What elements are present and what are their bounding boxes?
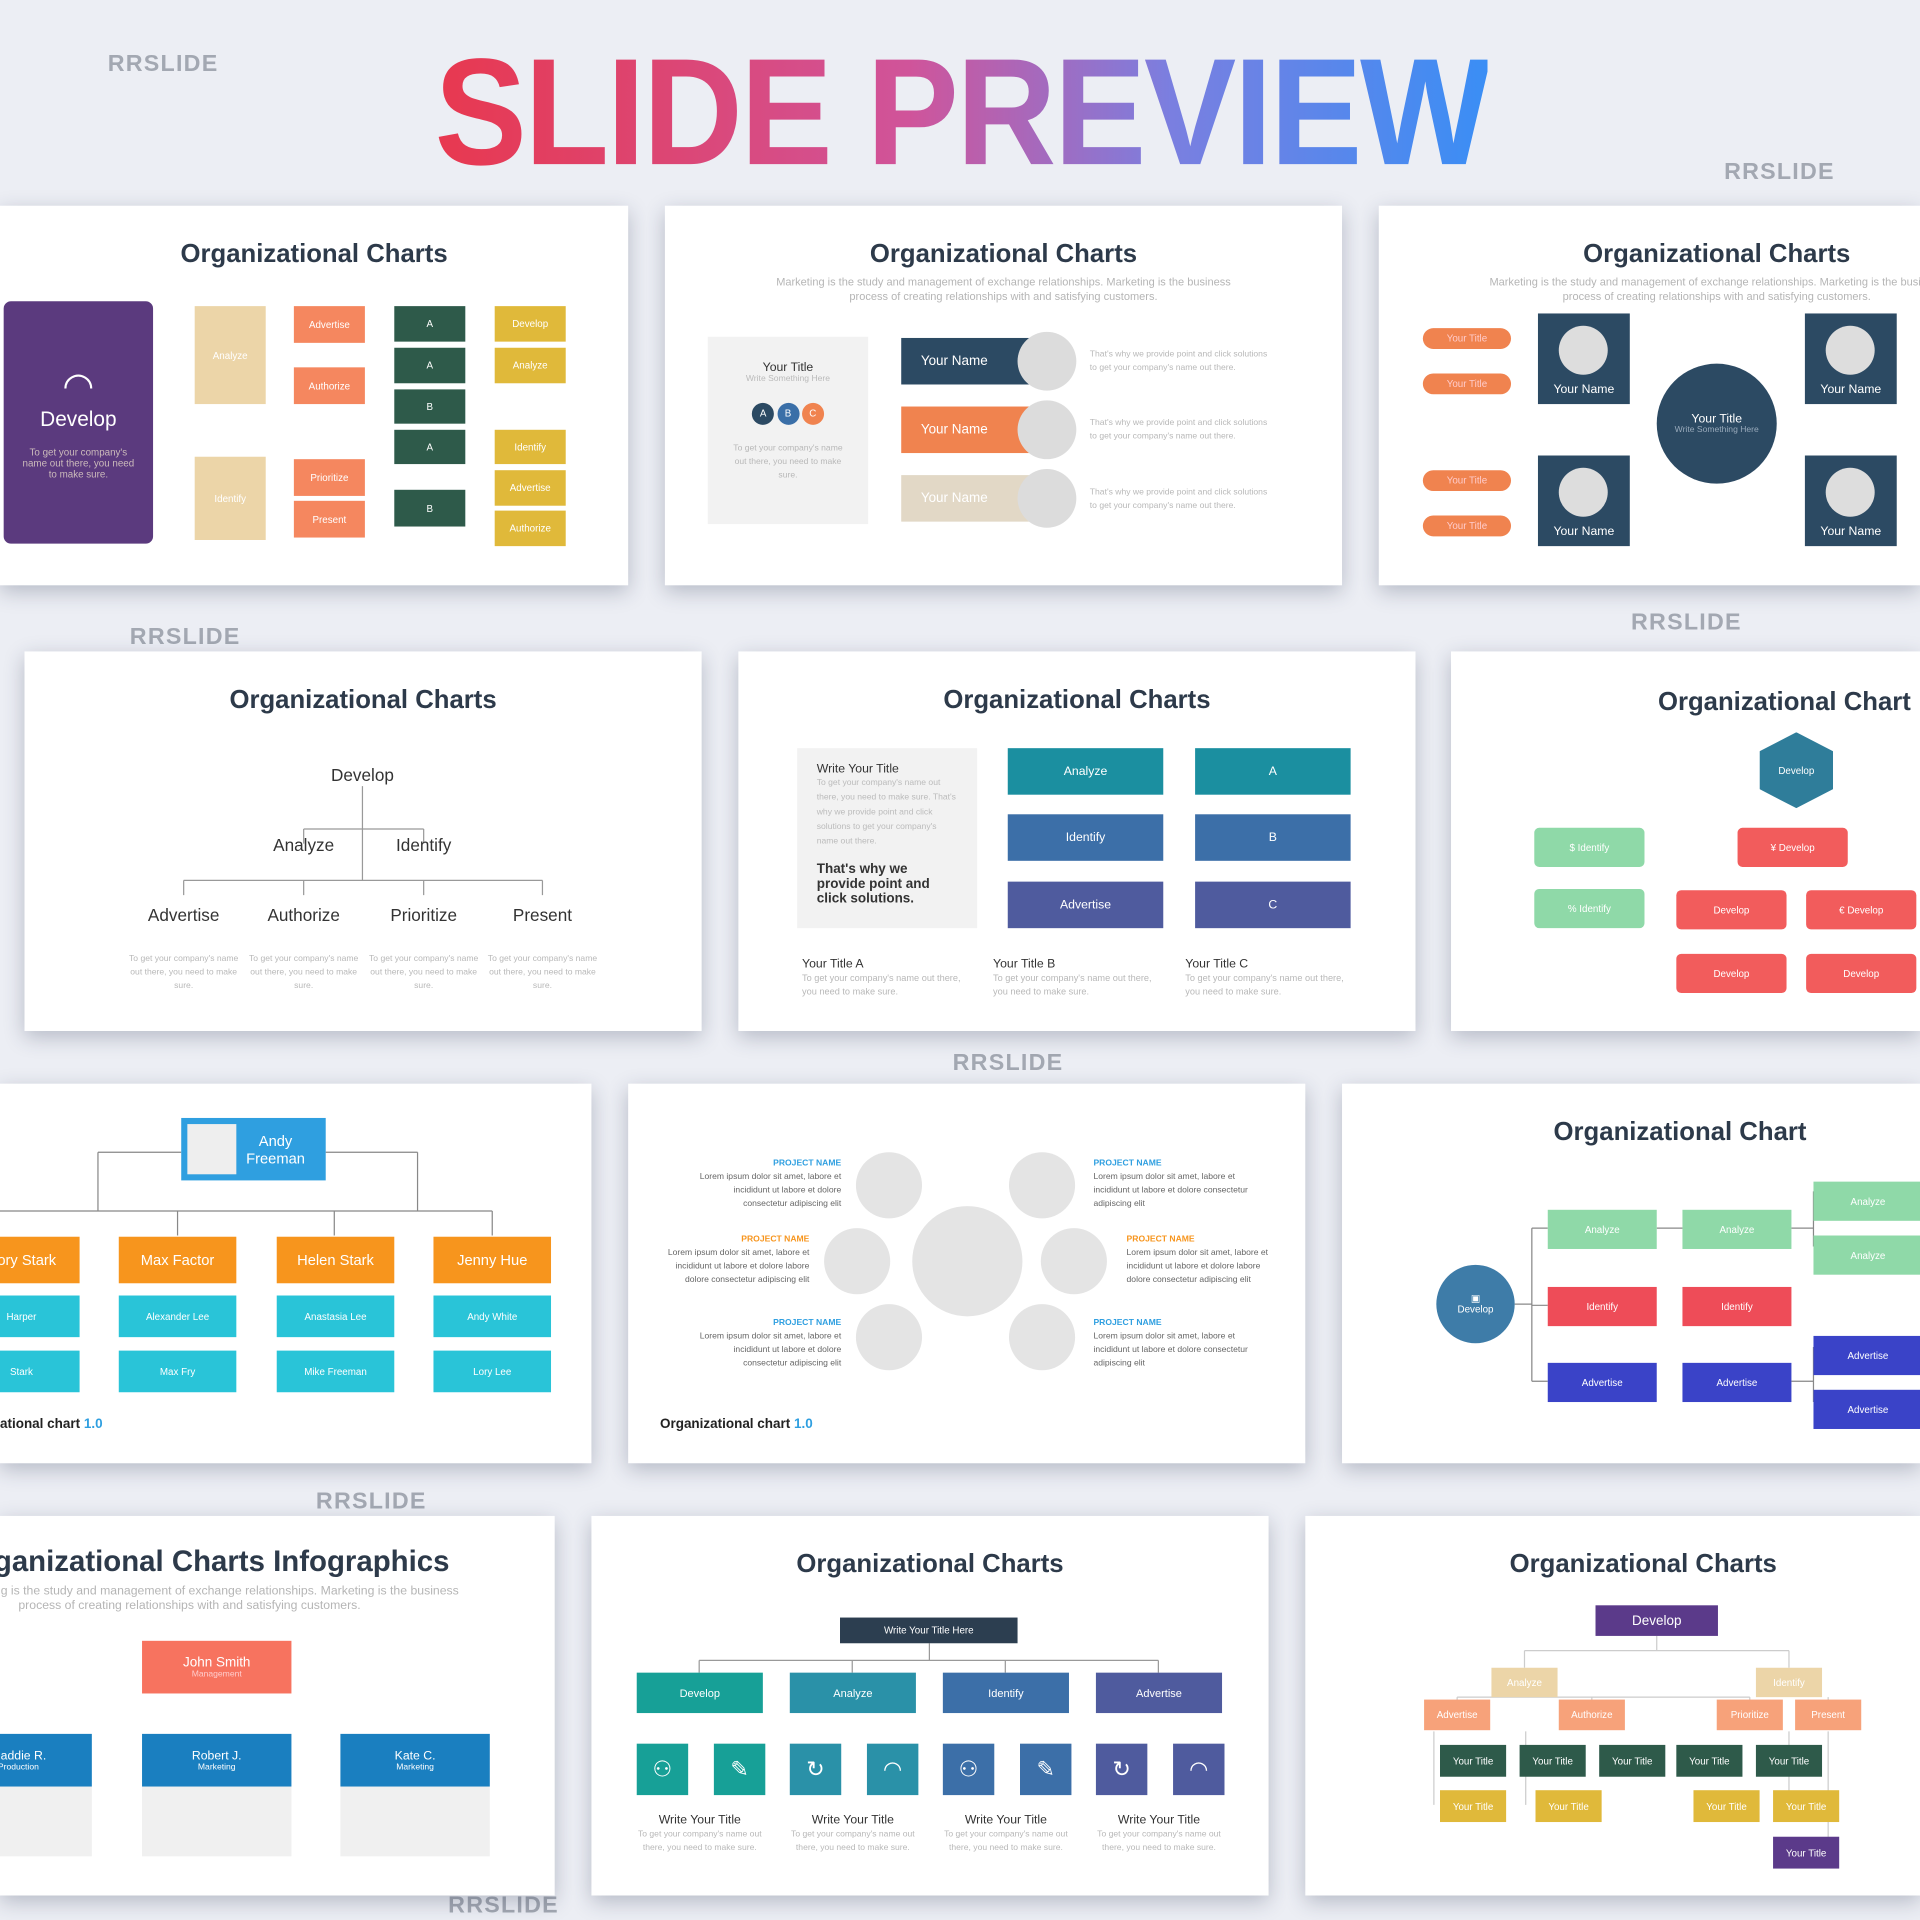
slide 8: circles: Lorem ipsum dolor sit amet, labore et incididunt ut labore et dolore labore dolore consectetur adipiscing elit	[1127, 1249, 1268, 1284]
slide 2: names list: to get your company's name out there.	[1090, 432, 1236, 441]
left panel: B	[785, 408, 791, 419]
slide 1: org chart develop: B	[427, 401, 433, 412]
slide 6: hexagon chart: Develop	[1713, 968, 1749, 979]
slide 12: tiered chart: Present	[1811, 1709, 1845, 1720]
slide 4: tree: Identify	[396, 835, 451, 855]
slide 8: circles	[628, 1084, 1305, 1463]
slide 4: tree: To get your company's name out there, you need to make sure.	[369, 955, 478, 991]
slide 11: icons chart: To get your company's name out there, you need to make sure.	[944, 1831, 1068, 1853]
slide 3: circle hub: Your Title	[1447, 333, 1487, 344]
watermark: RRSLIDE	[448, 1893, 559, 1919]
slide 8: circles: Lorem ipsum dolor sit amet, labore et incididunt ut labore et dolore consectetur adipiscing elit	[1093, 1173, 1248, 1209]
slide 3: circle hub	[1379, 206, 1920, 585]
slide 5: grid: To get your company's name out there,	[802, 972, 961, 983]
left panel: Your Title	[763, 361, 813, 375]
title: SLIDE PREVIEW	[435, 28, 1488, 197]
slide 1: org chart develop: Develop	[512, 318, 548, 329]
slide 6: hexagon chart: Develop	[1713, 904, 1749, 915]
slide 10: infographics: Robert J.	[192, 1749, 242, 1763]
slide 5: grid: you need to make sure.	[993, 986, 1089, 997]
slide 12: tiered chart: Your Title	[1453, 1755, 1493, 1766]
slide 4: tree: To get your company's name out there, you need to make sure.	[488, 955, 597, 991]
watermark: RRSLIDE	[1724, 159, 1835, 185]
slide 9: color chart: Identify	[1721, 1301, 1753, 1312]
slide 8: circles: Lorem ipsum dolor sit amet, labore et incididunt ut labore et dolore consectetur adipiscing elit	[700, 1173, 841, 1209]
slide 9: color chart: Advertise	[1848, 1350, 1888, 1361]
slide 12: tiered chart: Your Title	[1689, 1755, 1730, 1766]
left panel: C	[809, 408, 816, 419]
slide 8: circles: PROJECT NAME	[1127, 1236, 1195, 1244]
watermark: RRSLIDE	[108, 51, 218, 77]
slide 2: names list: Your Name	[921, 422, 988, 437]
slide 12: tiered chart: Your Title	[1706, 1801, 1747, 1812]
slide 9: color chart: Advertise	[1717, 1377, 1757, 1388]
slide 11: icons chart: To get your company's name out there, you need to make sure.	[791, 1831, 915, 1853]
slide 3: circle hub: Write Something Here	[1675, 426, 1759, 435]
slide 1: org chart develop	[0, 206, 628, 585]
slide 1: org chart develop: Authorize	[309, 380, 350, 391]
slide 2: names list: Your Name	[921, 354, 988, 369]
slide 4: tree: Present	[513, 905, 572, 924]
slide 11: icons chart: Write Your Title	[659, 1813, 741, 1827]
left panel: Write Something Here	[746, 375, 830, 383]
slide 11: icons chart: ◠	[883, 1757, 902, 1781]
slide 7: people chart: Max Fry	[160, 1366, 195, 1377]
slide 5: grid: Your Title C	[1185, 958, 1248, 971]
slide 4: tree: To get your company's name out there, you need to make sure.	[249, 955, 358, 991]
slide 7: people chart: Harper	[6, 1311, 36, 1322]
slide 11: icons chart: ◠	[1189, 1757, 1208, 1781]
slide 11: icons chart: ↻	[806, 1757, 825, 1781]
slide 7: people chart	[0, 1084, 591, 1463]
slide 8: circles: PROJECT NAME	[773, 1319, 841, 1327]
slide 9: color chart: ▣	[1471, 1293, 1480, 1304]
slide 5: grid: you need to make sure.	[802, 986, 898, 997]
slide 9: color chart: Analyze	[1585, 1224, 1620, 1235]
slide 7: people chart: Andy White	[467, 1311, 517, 1322]
slide 10: infographics: Marketing	[396, 1763, 434, 1771]
slide 10: infographics: John Smith	[183, 1656, 250, 1670]
purple develop box: ◠	[62, 366, 94, 407]
slide 11: icons chart: Advertise	[1136, 1687, 1182, 1699]
slide 5: grid: B	[1269, 831, 1277, 844]
slide 4: tree: Organizational Charts	[229, 686, 497, 714]
slide 6: hexagon chart: ¥ Develop	[1771, 842, 1815, 853]
slide 6: hexagon chart: Organizational Chart	[1658, 688, 1911, 716]
watermark: RRSLIDE	[1631, 610, 1742, 636]
slide 12: tiered chart: Prioritize	[1731, 1709, 1769, 1720]
slide 12: tiered chart: Organizational Charts	[1510, 1550, 1777, 1578]
slide 7: people chart: Lory Lee	[473, 1366, 511, 1377]
slide 11: icons chart: Write Your Title	[812, 1813, 894, 1827]
slide 9: color chart: Analyze	[1851, 1250, 1885, 1261]
slide 11: icons chart: Organizational Charts	[796, 1550, 1064, 1578]
slide 2: names list: That's why we provide point and click solutions	[1090, 419, 1267, 427]
slide 8: circles: PROJECT NAME	[773, 1160, 841, 1168]
slide 10: infographics	[0, 1516, 555, 1896]
slide 9: color chart	[1342, 1084, 1920, 1463]
slide 5: grid: Your Title A	[802, 958, 864, 971]
slide 11: icons chart: Identify	[988, 1687, 1024, 1699]
slide 7: people chart: Mike Freeman	[304, 1366, 367, 1377]
slide 3: circle hub: process of creating relationships with and satisfying customers.	[1563, 290, 1871, 302]
slide 3: circle hub: Organizational Charts	[1583, 240, 1850, 268]
slide 5: grid: To get your company's name out there,	[1185, 972, 1344, 983]
slide 11: icons chart: ⚇	[653, 1757, 672, 1781]
slide 12: tiered chart: Your Title	[1786, 1847, 1826, 1858]
slide 8: circles: PROJECT NAME	[1093, 1319, 1162, 1327]
slide 3: circle hub: Your Name	[1820, 525, 1881, 539]
slide 4: tree: Prioritize	[390, 905, 457, 924]
slide 9: color chart: Analyze	[1720, 1224, 1754, 1235]
slide 7: people chart: Anastasia Lee	[304, 1311, 367, 1322]
slide 11: icons chart: Write Your Title Here	[884, 1625, 974, 1636]
slide 2: names list	[665, 206, 1342, 585]
slide 4: tree: Authorize	[267, 905, 340, 924]
slide 6: hexagon chart: % Identify	[1568, 903, 1611, 914]
slide 12: tiered chart	[1305, 1516, 1920, 1896]
slide 11: icons chart: ⚇	[959, 1757, 978, 1781]
slide 1: org chart develop: A	[427, 360, 433, 371]
slide 2: names list: Your Name	[921, 491, 988, 506]
watermark: RRSLIDE	[130, 624, 240, 650]
slide 12: tiered chart: Advertise	[1437, 1709, 1478, 1720]
slide 5: grid: Write Your Title	[817, 763, 899, 776]
slide 3: circle hub: Your Title	[1447, 378, 1487, 389]
slide 11: icons chart: Develop	[680, 1687, 720, 1699]
watermark: RRSLIDE	[953, 1051, 1063, 1076]
slide 1: org chart develop: Advertise	[510, 482, 551, 493]
slide 2: names list: That's why we provide point and click solutions	[1090, 350, 1267, 359]
purple develop box: Develop	[40, 408, 117, 431]
slide 12: tiered chart: Your Title	[1612, 1755, 1652, 1766]
slide 7: people chart: Freeman	[246, 1149, 305, 1166]
slide 3: circle hub: Your Title	[1447, 475, 1487, 486]
slide 11: icons chart	[591, 1516, 1269, 1896]
slide 1: org chart develop: Identify	[214, 493, 246, 504]
left panel: To get your company's name out there, you need to make sure.	[733, 444, 843, 480]
slide 3: circle hub: Your Title	[1447, 520, 1487, 531]
slide 5: grid: To get your company's name out there,	[993, 972, 1152, 983]
slide 11: icons chart: To get your company's name out there, you need to make sure.	[1097, 1831, 1221, 1853]
slide 11: icons chart: ↻	[1112, 1757, 1131, 1781]
slide 7: people chart: Jenny Hue	[457, 1251, 527, 1269]
slide 2: names list: process of creating relationships with and satisfying customers.	[849, 290, 1158, 302]
slide 10: infographics: process of creating relationships with and satisfying customers.	[18, 1599, 361, 1613]
slide 9: color chart: Develop	[1458, 1304, 1493, 1315]
slide 12: tiered chart: Analyze	[1507, 1677, 1542, 1688]
slide 6: hexagon chart	[1451, 651, 1920, 1031]
slide 1: org chart develop: Organizational Charts	[180, 240, 448, 268]
slide 1: org chart develop: A	[427, 441, 433, 452]
slide 2: names list: to get your company's name out there.	[1090, 364, 1236, 372]
left panel	[708, 337, 868, 524]
slide 11: icons chart: To get your company's name out there, you need to make sure.	[638, 1831, 762, 1853]
slide 3: circle hub: Your Name	[1553, 525, 1614, 539]
slide 5: grid: Analyze	[1064, 765, 1107, 778]
slide 12: tiered chart: Your Title	[1786, 1801, 1826, 1812]
slide 9: color chart: Advertise	[1848, 1404, 1888, 1415]
slide 10: infographics: Kate C.	[395, 1749, 436, 1763]
slide 6: hexagon chart: € Develop	[1839, 904, 1883, 915]
slide 12: tiered chart: Your Title	[1548, 1801, 1589, 1812]
slide 9: color chart: Advertise	[1582, 1377, 1623, 1388]
slide 8: circles: Lorem ipsum dolor sit amet, labore et incididunt ut labore et dolore consectetur adipiscing elit	[1093, 1332, 1248, 1368]
slide 7: people chart: Andy	[259, 1132, 292, 1149]
slide 1: org chart develop: Analyze	[213, 350, 248, 361]
slide 1: org chart develop: Authorize	[510, 523, 551, 534]
slide 5: grid: Organizational Charts	[943, 686, 1211, 714]
slide 10: infographics: ting is the study and management of exchange relationships. Marketing is the business	[0, 1584, 459, 1598]
slide 5: grid: To get your company's name out there, you need to make sure. That's why we provide point and click solutions to get your company's name out there.	[817, 779, 956, 846]
slide 5: grid: That's why we provide point and click solutions.	[817, 862, 930, 906]
left panel: A	[760, 408, 766, 419]
slide 6: hexagon chart: $ Identify	[1570, 842, 1609, 853]
slide 10: infographics: Management	[192, 1670, 242, 1679]
slide 4: tree: Advertise	[148, 905, 219, 924]
purple develop box: To get your company's name out there, you need to make sure.	[23, 447, 134, 480]
slide 6: hexagon chart: Develop	[1843, 968, 1879, 979]
slide 5: grid	[738, 651, 1416, 1031]
slide 12: tiered chart: Your Title	[1532, 1755, 1573, 1766]
slide 3: circle hub: Your Name	[1553, 383, 1614, 397]
slide 12: tiered chart: Identify	[1773, 1677, 1805, 1688]
slide 1: org chart develop: A	[427, 318, 433, 329]
slide 1: org chart develop: Analyze	[513, 360, 548, 371]
slide 12: tiered chart: Your Title	[1769, 1755, 1809, 1766]
slide 5: grid: Advertise	[1060, 898, 1111, 912]
slide 1: org chart develop: Prioritize	[310, 472, 348, 483]
slide 10: infographics: Marketing	[198, 1763, 236, 1771]
slide 7: people chart: Alexander Lee	[146, 1311, 209, 1322]
slide 1: org chart develop: B	[427, 503, 433, 514]
slide 11: icons chart: Analyze	[833, 1687, 872, 1699]
slide 5: grid: Your Title B	[993, 958, 1055, 971]
slide 4: tree	[24, 651, 702, 1031]
slide 5: grid: A	[1269, 765, 1277, 778]
slide 2: names list: to get your company's name out there.	[1090, 502, 1236, 511]
slide 8: circles: PROJECT NAME	[1093, 1160, 1162, 1168]
slide 9: color chart: Organizational Chart	[1554, 1118, 1806, 1146]
slide 4: tree: Develop	[331, 765, 394, 785]
slide 8: circles: Lorem ipsum dolor sit amet, labore et incididunt ut labore et dolore consectetur adipiscing elit	[700, 1332, 841, 1368]
slide 11: icons chart: Write Your Title	[965, 1813, 1047, 1827]
slide 8: circles: PROJECT NAME	[741, 1236, 809, 1244]
slide 11: icons chart: ✎	[730, 1757, 749, 1781]
purple develop box	[4, 301, 153, 544]
slide 4: tree: Analyze	[273, 835, 334, 855]
slide 9: color chart: Identify	[1586, 1301, 1618, 1312]
slide 3: circle hub: Your Title	[1691, 413, 1742, 426]
slide 1: org chart develop: Present	[312, 514, 346, 525]
slide 5: grid: Identify	[1066, 831, 1105, 844]
slide 8: circles: Lorem ipsum dolor sit amet, labore et incididunt ut labore et dolore labore dolore consectetur adipiscing elit	[668, 1249, 809, 1284]
slide 11: icons chart: ✎	[1036, 1757, 1055, 1781]
slide 7: people chart: Helen Stark	[297, 1251, 374, 1269]
slide 11: icons chart: Write Your Title	[1118, 1813, 1200, 1827]
watermark: RRSLIDE	[316, 1489, 427, 1515]
slide 12: tiered chart: Develop	[1632, 1613, 1681, 1628]
slide 5: grid: you need to make sure.	[1185, 986, 1281, 997]
slide 9: color chart: Analyze	[1851, 1196, 1885, 1207]
slide 12: tiered chart: Your Title	[1453, 1801, 1493, 1812]
slide 6: hexagon chart: Develop	[1778, 765, 1814, 776]
slide 1: org chart develop: Advertise	[309, 319, 350, 330]
slide 1: org chart develop: Identify	[514, 441, 546, 452]
slide 2: names list: Marketing is the study and management of exchange relationships. Marketing is the business	[776, 276, 1231, 288]
slide 4: tree: To get your company's name out there, you need to make sure.	[129, 955, 238, 991]
slide 7: people chart: Stark	[10, 1366, 33, 1377]
slide 10: infographics: ganizational Charts Infographics	[0, 1545, 449, 1578]
slide 8: circles: Organizational chart 1.0	[660, 1417, 813, 1431]
slide 7: people chart: ational chart 1.0	[0, 1417, 103, 1431]
slide 3: circle hub: Your Name	[1820, 383, 1881, 397]
slide 12: tiered chart: Authorize	[1571, 1709, 1613, 1720]
slide 5: grid: C	[1268, 898, 1277, 912]
slide 7: people chart: Max Factor	[141, 1251, 214, 1269]
slide 2: names list: Organizational Charts	[870, 240, 1137, 268]
slide 2: names list: That's why we provide point and click solutions	[1090, 489, 1267, 497]
